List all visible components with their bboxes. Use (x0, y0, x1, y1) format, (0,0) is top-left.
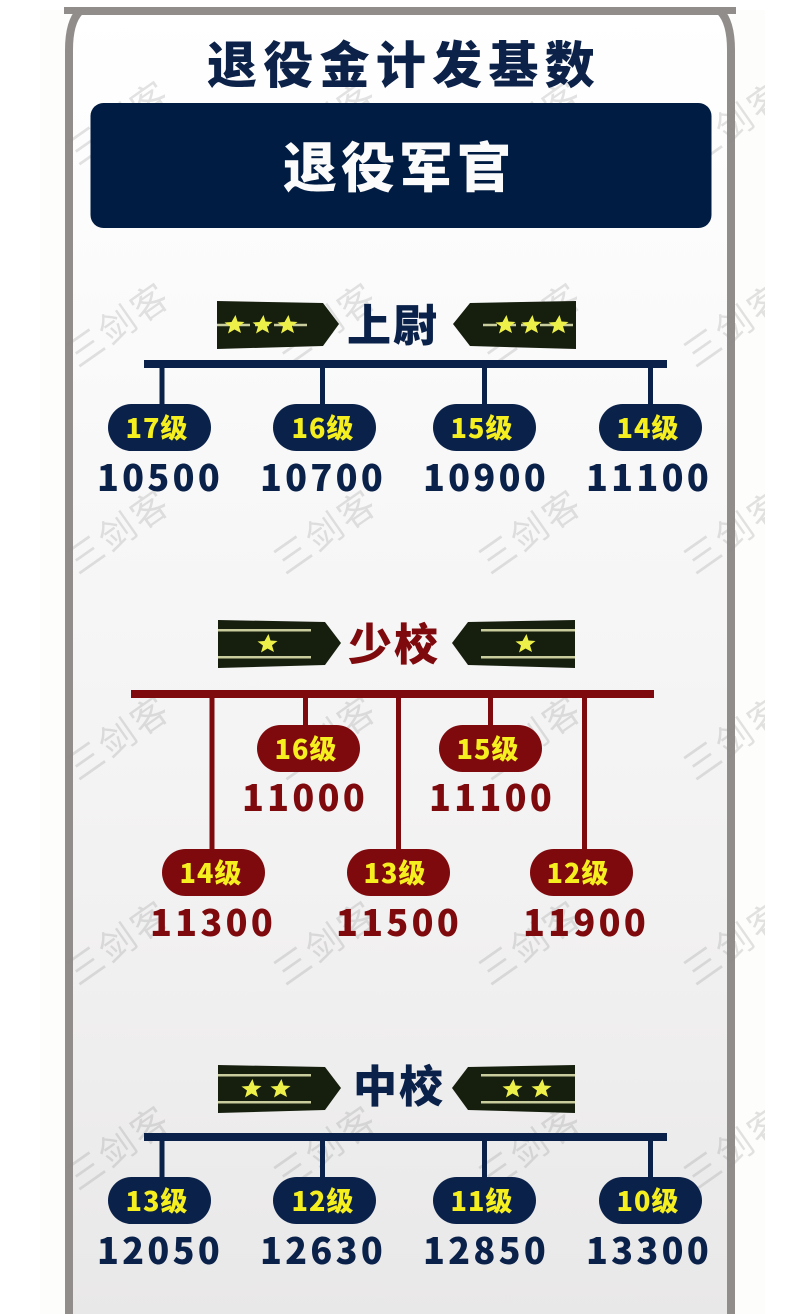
rank insignia right: 少校 (452, 620, 575, 668)
grade 12 (260, 1177, 386, 1275)
watermark pattern: 三剑客 (467, 268, 592, 378)
watermark pattern: 三剑客 (262, 1091, 387, 1201)
panel: 上尉 (97, 290, 712, 502)
watermark pattern: 三剑客 (467, 475, 592, 585)
panel: 少校 (131, 609, 654, 947)
grade 15 (429, 725, 555, 822)
heading: 少校: 少校 (348, 609, 440, 673)
banner: 退役军官: 退役军官 (283, 124, 515, 203)
watermark pattern: 三剑客 (262, 475, 387, 585)
grade 15: 15级 (457, 728, 519, 767)
watermark pattern: 三剑客 (262, 66, 387, 176)
grade 13: 13级 (364, 852, 426, 891)
grade 15: 10900 (423, 450, 549, 502)
grade 11: 11级 (451, 1180, 513, 1219)
grade 10: 13300 (586, 1223, 712, 1275)
watermark pattern: 三剑客 (55, 66, 180, 176)
grade 14: 11100 (586, 450, 712, 502)
watermark pattern: 三剑客 (672, 268, 797, 378)
tree connector (131, 690, 654, 851)
grade 13: 12050 (97, 1223, 223, 1275)
grade 14: 14级 (180, 852, 242, 891)
grade 16: 11000 (242, 770, 368, 822)
watermark pattern: 三剑客 (467, 1091, 592, 1201)
grade 14 (586, 404, 712, 502)
grade 16 (242, 725, 368, 822)
grade 12: 11900 (523, 895, 649, 947)
tree connector (144, 1133, 667, 1179)
rank insignia right: 上尉 (453, 301, 576, 349)
watermark pattern: 三剑客 (467, 66, 592, 176)
grade 16: 10700 (260, 450, 386, 502)
grade 10: 10级 (617, 1180, 679, 1219)
grade 12: 12级 (292, 1180, 354, 1219)
heading: 上尉: 上尉 (347, 290, 439, 354)
watermark pattern: 三剑客 (672, 475, 797, 585)
grade 16: 16级 (275, 728, 337, 767)
grade 15 (423, 404, 549, 502)
watermark pattern: 三剑客 (55, 681, 180, 791)
rank insignia left: 少校 (218, 620, 341, 668)
grade 12: 12级 (547, 852, 609, 891)
watermark pattern: 三剑客 (55, 268, 180, 378)
watermark pattern: 三剑客 (672, 681, 797, 791)
tree connector (144, 360, 667, 406)
watermark pattern: 三剑客 (262, 886, 387, 996)
grade 11: 12850 (423, 1223, 549, 1275)
rank insignia left: 上尉 (217, 301, 339, 349)
grade 17: 10500 (97, 450, 223, 502)
grade 13 (336, 849, 462, 947)
watermark pattern: 三剑客 (262, 681, 387, 791)
watermark pattern: 三剑客 (672, 66, 797, 176)
grade 11 (423, 1177, 549, 1275)
grade 13: 11500 (336, 895, 462, 947)
watermark pattern: 三剑客 (55, 1091, 180, 1201)
watermark pattern: 三剑客 (672, 886, 797, 996)
grade 14 (150, 849, 276, 947)
heading: 中校: 中校 (353, 1051, 445, 1115)
title: 退役金计发基数 (207, 26, 601, 98)
grade 13: 13级 (126, 1180, 188, 1219)
grade 13 (97, 1177, 223, 1275)
watermark pattern: 三剑客 (672, 1091, 797, 1201)
grade 16: 16级 (292, 407, 354, 446)
watermark pattern: 三剑客 (55, 475, 180, 585)
grade 16 (260, 404, 386, 502)
grade 14: 14级 (617, 407, 679, 446)
grade 14: 11300 (150, 895, 276, 947)
grade 15: 15级 (451, 407, 513, 446)
watermark pattern: 三剑客 (55, 886, 180, 996)
rank insignia right: 中校 (452, 1065, 575, 1113)
panel: 中校 (97, 1051, 712, 1275)
grade 12: 12630 (260, 1223, 386, 1275)
banner: 退役军官 (90, 103, 712, 228)
watermark pattern: 三剑客 (467, 681, 592, 791)
rank insignia left: 中校 (218, 1065, 341, 1113)
grade 15: 11100 (429, 770, 555, 822)
grade 17 (97, 404, 223, 502)
grade 12 (523, 849, 649, 947)
grade 17: 17级 (126, 407, 188, 446)
grade 10 (586, 1177, 712, 1275)
watermark pattern: 三剑客 (467, 886, 592, 996)
watermark pattern: 三剑客 (262, 268, 387, 378)
